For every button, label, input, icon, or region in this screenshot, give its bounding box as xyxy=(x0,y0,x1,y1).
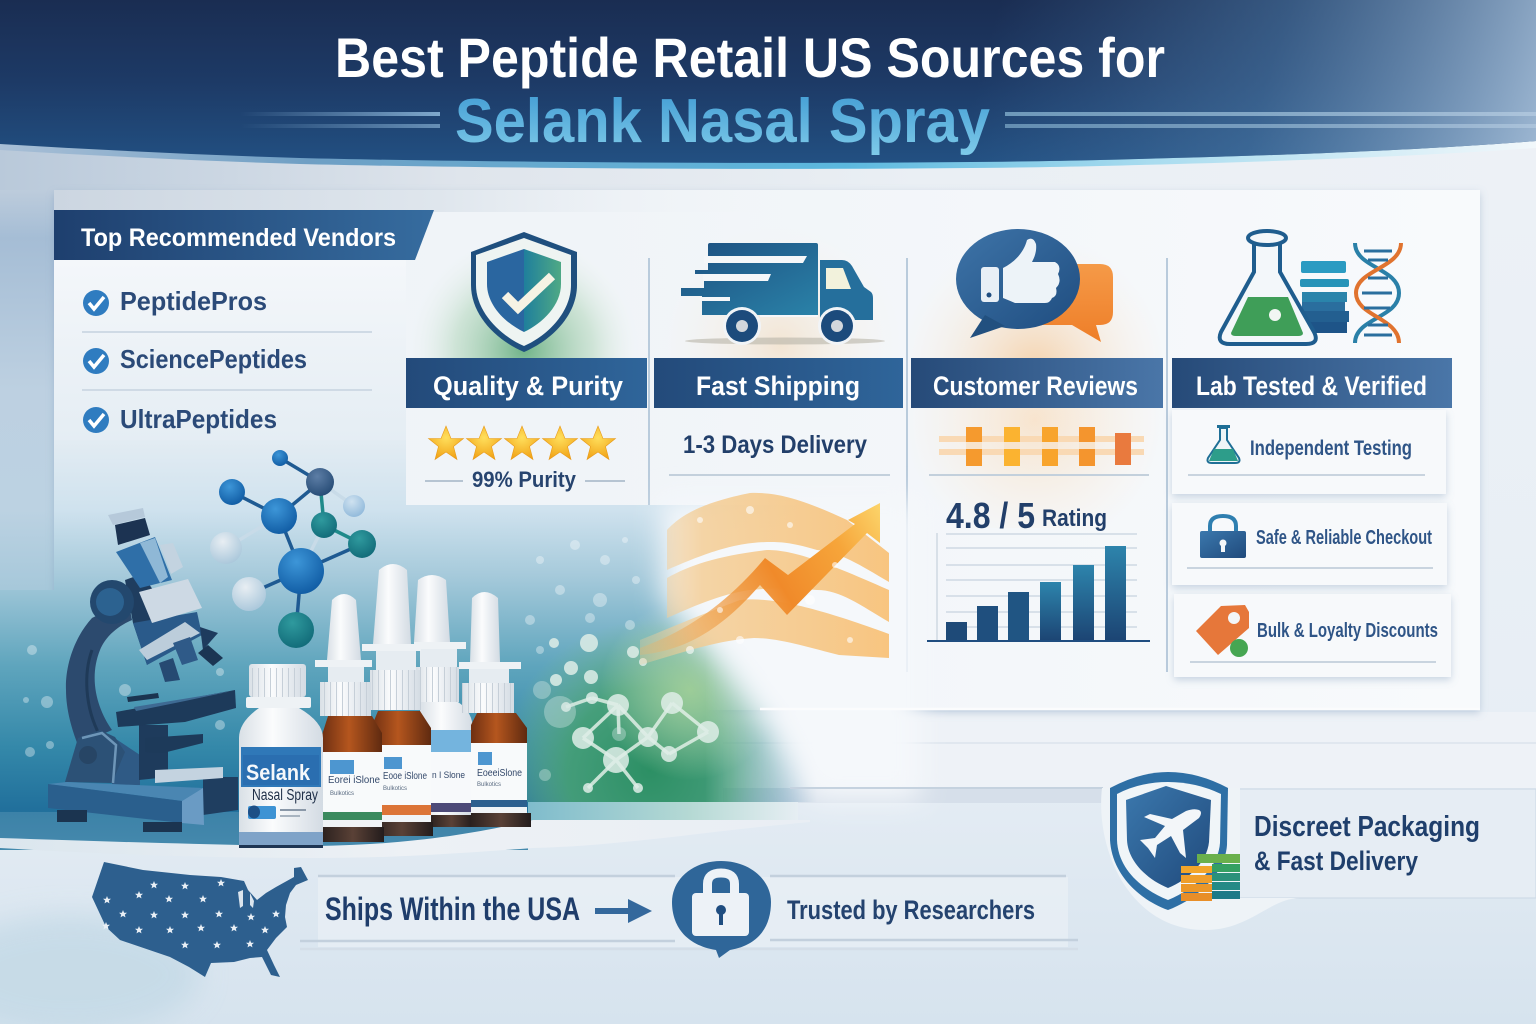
table shelf xyxy=(0,820,810,858)
airplane xyxy=(1140,809,1201,858)
bottle 2: Eorei iSlone xyxy=(328,775,380,786)
bottle 4: n I Slone xyxy=(432,770,465,781)
bottle 3: Bulkotics xyxy=(383,786,407,792)
column: fast shipping xyxy=(654,358,903,475)
table strip xyxy=(528,802,798,822)
card: safe and reliable checkout xyxy=(1172,503,1447,585)
tube xyxy=(116,537,172,588)
panel top shading xyxy=(54,190,1480,212)
icon: padlock badge xyxy=(672,861,771,958)
icon: reviews thumbs up bubble xyxy=(956,229,1113,342)
icon: shield with airplane xyxy=(1110,772,1228,910)
panel: left column background xyxy=(54,260,406,460)
card: independent testing: Independent Testing xyxy=(1250,437,1412,460)
icon: delivery truck xyxy=(681,243,885,345)
purity label: 99% Purity xyxy=(472,467,577,492)
bottle 1 Selank xyxy=(239,664,323,848)
icon: wave and growth arrow xyxy=(640,493,889,665)
card: safe and reliable checkout: Safe & Reliable Checkout xyxy=(1256,527,1432,549)
panel: discreet packaging xyxy=(1101,772,1536,930)
column title: Fast Shipping xyxy=(696,371,860,401)
molecule network: faded xyxy=(533,634,719,793)
discreet packaging text: Discreet Packaging xyxy=(1254,811,1480,843)
column: quality and purity xyxy=(406,358,647,492)
bottle 2 xyxy=(315,594,384,842)
header banner xyxy=(0,0,1536,169)
bottle 3 xyxy=(362,564,433,836)
bar chart xyxy=(927,533,1150,641)
bottle 2: Bulkotics xyxy=(330,791,354,797)
band under shelf xyxy=(318,877,1068,947)
stacked discs xyxy=(1300,261,1349,333)
white ring xyxy=(139,622,200,660)
icon: USA map xyxy=(92,862,308,977)
bottle 5: Bulkotics xyxy=(477,782,501,788)
column: lab tested and verified xyxy=(1172,358,1452,677)
card: bulk and loyalty discounts xyxy=(1174,594,1451,677)
icon: stacked parcels xyxy=(1181,854,1240,901)
dark tube backing xyxy=(125,574,168,665)
eyepiece xyxy=(108,508,145,525)
stage xyxy=(116,690,236,727)
vendor heading: Top Recommended Vendors xyxy=(81,224,396,252)
discreet packaging text xyxy=(1254,811,1480,876)
bottom strip lines xyxy=(300,876,1078,949)
slide xyxy=(155,767,223,783)
panel background xyxy=(1238,789,1536,898)
panel bottom edge xyxy=(760,708,1480,710)
text: ships within the USA: Ships Within the USA xyxy=(325,891,580,927)
five star rating xyxy=(428,426,616,460)
arrow xyxy=(595,899,652,923)
lower left soft cloud xyxy=(0,915,200,1024)
icon: microscope xyxy=(48,508,238,832)
bottle 3: Eooe iSlone xyxy=(383,771,427,782)
label text Selank: Selank xyxy=(246,760,311,785)
lower body xyxy=(133,612,202,665)
icon: quality shield xyxy=(471,232,577,352)
column title: Lab Tested & Verified xyxy=(1196,371,1427,401)
lower right horizontal bands xyxy=(723,712,1536,803)
icon: lab flask, stack and DNA xyxy=(1220,231,1401,344)
title: Best Peptide Retail US Sources for xyxy=(335,26,1165,89)
column divider lines xyxy=(649,258,1167,672)
column header xyxy=(911,358,1163,408)
panel: top recommended vendors xyxy=(54,210,434,434)
title decoration lines xyxy=(240,112,1536,128)
vendor: SciencePeptides: SciencePeptides xyxy=(120,344,307,374)
vendor: PeptidePros: PeptidePros xyxy=(120,286,267,316)
hero scene background xyxy=(0,460,810,850)
text: trusted by researchers: Trusted by Researchers xyxy=(787,895,1035,925)
column title: Customer Reviews xyxy=(933,371,1138,401)
column title: Quality & Purity xyxy=(433,371,623,401)
flask xyxy=(1220,242,1316,344)
panel: main content background xyxy=(54,190,1480,710)
card: bulk and loyalty discounts: Bulk & Loyalty Discounts xyxy=(1257,620,1438,642)
title xyxy=(335,26,1165,156)
delivery time: 1-3 Days Delivery xyxy=(683,431,867,459)
objectives xyxy=(173,637,198,665)
left table top tint xyxy=(0,812,528,850)
grey band edge xyxy=(790,787,1103,789)
rating value: Rating xyxy=(1042,505,1107,532)
knob xyxy=(90,580,134,624)
DNA helix xyxy=(1355,243,1401,343)
orange rating blocks xyxy=(939,427,1144,466)
rating value xyxy=(946,495,1107,536)
bottle 5 xyxy=(459,592,531,827)
collar xyxy=(139,579,202,623)
vendor heading ribbon xyxy=(54,210,434,260)
bottle 5: EoeeiSlone xyxy=(477,768,522,779)
icon: molecule xyxy=(210,450,376,648)
focus knob xyxy=(145,734,203,753)
panel background glows xyxy=(406,215,1165,528)
rear base xyxy=(203,777,238,815)
label text Nasal Spray: Nasal Spray xyxy=(252,787,318,804)
card: independent testing xyxy=(1172,410,1446,494)
scene fade into panel xyxy=(662,500,920,800)
rating value: 4.8 / 5 xyxy=(946,495,1035,536)
bottle 4 xyxy=(414,575,473,827)
column: customer reviews xyxy=(911,358,1163,641)
left margin tint xyxy=(0,190,54,590)
vendor: UltraPeptides: UltraPeptides xyxy=(120,404,277,434)
arm foot xyxy=(65,730,125,783)
arm xyxy=(66,600,132,745)
base xyxy=(48,782,203,801)
column header xyxy=(406,358,647,408)
column header xyxy=(654,358,903,408)
discreet packaging text: & Fast Delivery xyxy=(1254,846,1418,876)
title: Selank Nasal Spray xyxy=(455,87,990,156)
background speckles xyxy=(23,537,640,757)
nasal spray bottles xyxy=(239,564,531,848)
column header xyxy=(1172,358,1452,408)
column xyxy=(112,737,140,785)
band beneath header xyxy=(0,140,1536,200)
